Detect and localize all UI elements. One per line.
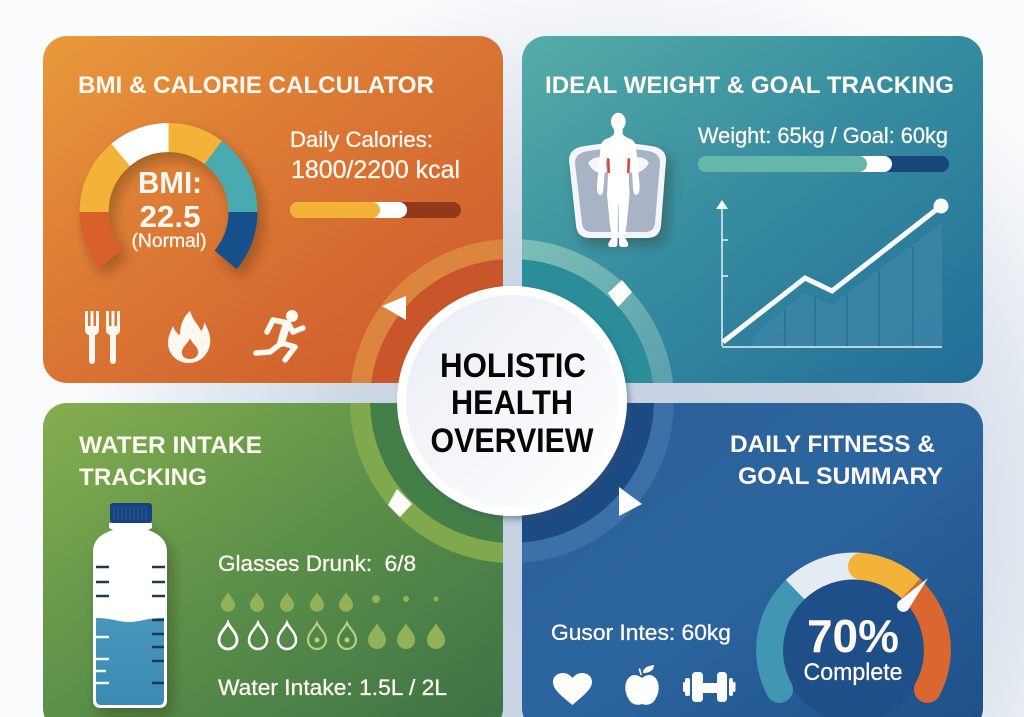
marker: teal diamond bbox=[608, 280, 632, 307]
panel: daily fitness and goal summary bbox=[522, 403, 983, 717]
icon: heart bbox=[553, 673, 592, 705]
title bbox=[430, 347, 594, 460]
marker: green diamond bbox=[388, 489, 412, 517]
line chart bbox=[716, 198, 948, 347]
panel: BMI and calorie calculator bbox=[43, 36, 503, 383]
water intake text: Water Intake: 1.5L / 2L bbox=[218, 675, 447, 700]
BMI donut gauge bbox=[79, 123, 257, 269]
arrow: orange to teal bbox=[382, 296, 406, 320]
heading: daily fitness and goal summary bbox=[730, 431, 943, 490]
droplets: bottom row bbox=[219, 623, 445, 649]
heading: water intake tracking: WATER INTAKE bbox=[79, 432, 262, 459]
ring markers bbox=[382, 280, 642, 517]
gauge needle bbox=[897, 578, 928, 612]
BMI value: BMI: bbox=[138, 165, 202, 200]
daily calories text: 1800/2200 kcal bbox=[291, 156, 460, 184]
droplets: top row bbox=[221, 592, 438, 612]
icon: person on scale bbox=[569, 113, 666, 247]
icon: water bottle bbox=[93, 503, 167, 708]
goal progress gauge bbox=[770, 553, 937, 717]
icon: forks bbox=[85, 311, 120, 364]
daily calories text: Daily Calories: bbox=[290, 127, 433, 152]
central hub bbox=[397, 286, 627, 516]
title: HEALTH bbox=[451, 384, 573, 422]
ring segment: green bbox=[350, 403, 503, 563]
ring segment: blue bbox=[522, 403, 674, 562]
gauge value: 70% bbox=[807, 610, 899, 662]
ring segment: orange bbox=[351, 239, 503, 383]
heading: daily fitness and goal summary: DAILY FITNESS & bbox=[730, 431, 935, 458]
icon: apple bbox=[625, 665, 659, 705]
heading: BMI and calorie calculator: BMI & CALORIE CALCULATOR bbox=[78, 72, 434, 99]
gauge value: Complete bbox=[804, 659, 902, 686]
glasses drunk text: Glasses Drunk: 6/8 bbox=[218, 551, 416, 576]
weight text: Weight: 65kg / Goal: 60kg bbox=[698, 123, 948, 148]
calorie progress bar bbox=[290, 202, 461, 218]
title: OVERVIEW bbox=[430, 422, 594, 460]
heading: water intake tracking bbox=[79, 432, 262, 491]
BMI value: (Normal) bbox=[132, 231, 206, 252]
gauge value bbox=[804, 610, 902, 686]
goal text: Gusor Intes: 60kg bbox=[551, 620, 731, 645]
icon: dumbbell bbox=[683, 672, 736, 702]
title: HOLISTIC bbox=[440, 347, 586, 385]
panel: water intake tracking bbox=[43, 403, 503, 717]
ring segment: teal bbox=[522, 239, 673, 383]
arrow: blue bbox=[619, 487, 642, 516]
daily calories text bbox=[290, 127, 460, 184]
heading: water intake tracking: TRACKING bbox=[79, 464, 207, 491]
panel: ideal weight and goal tracking bbox=[522, 36, 983, 383]
icon: runner bbox=[256, 310, 303, 360]
BMI value: 22.5 bbox=[140, 199, 200, 234]
heading: daily fitness and goal summary: GOAL SUMMARY bbox=[738, 463, 943, 490]
heading: ideal weight and goal tracking: IDEAL WEIGHT & GOAL TRACKING bbox=[545, 72, 954, 99]
BMI value bbox=[132, 165, 206, 252]
weight progress bar bbox=[698, 156, 949, 172]
icon: flame bbox=[168, 311, 210, 363]
